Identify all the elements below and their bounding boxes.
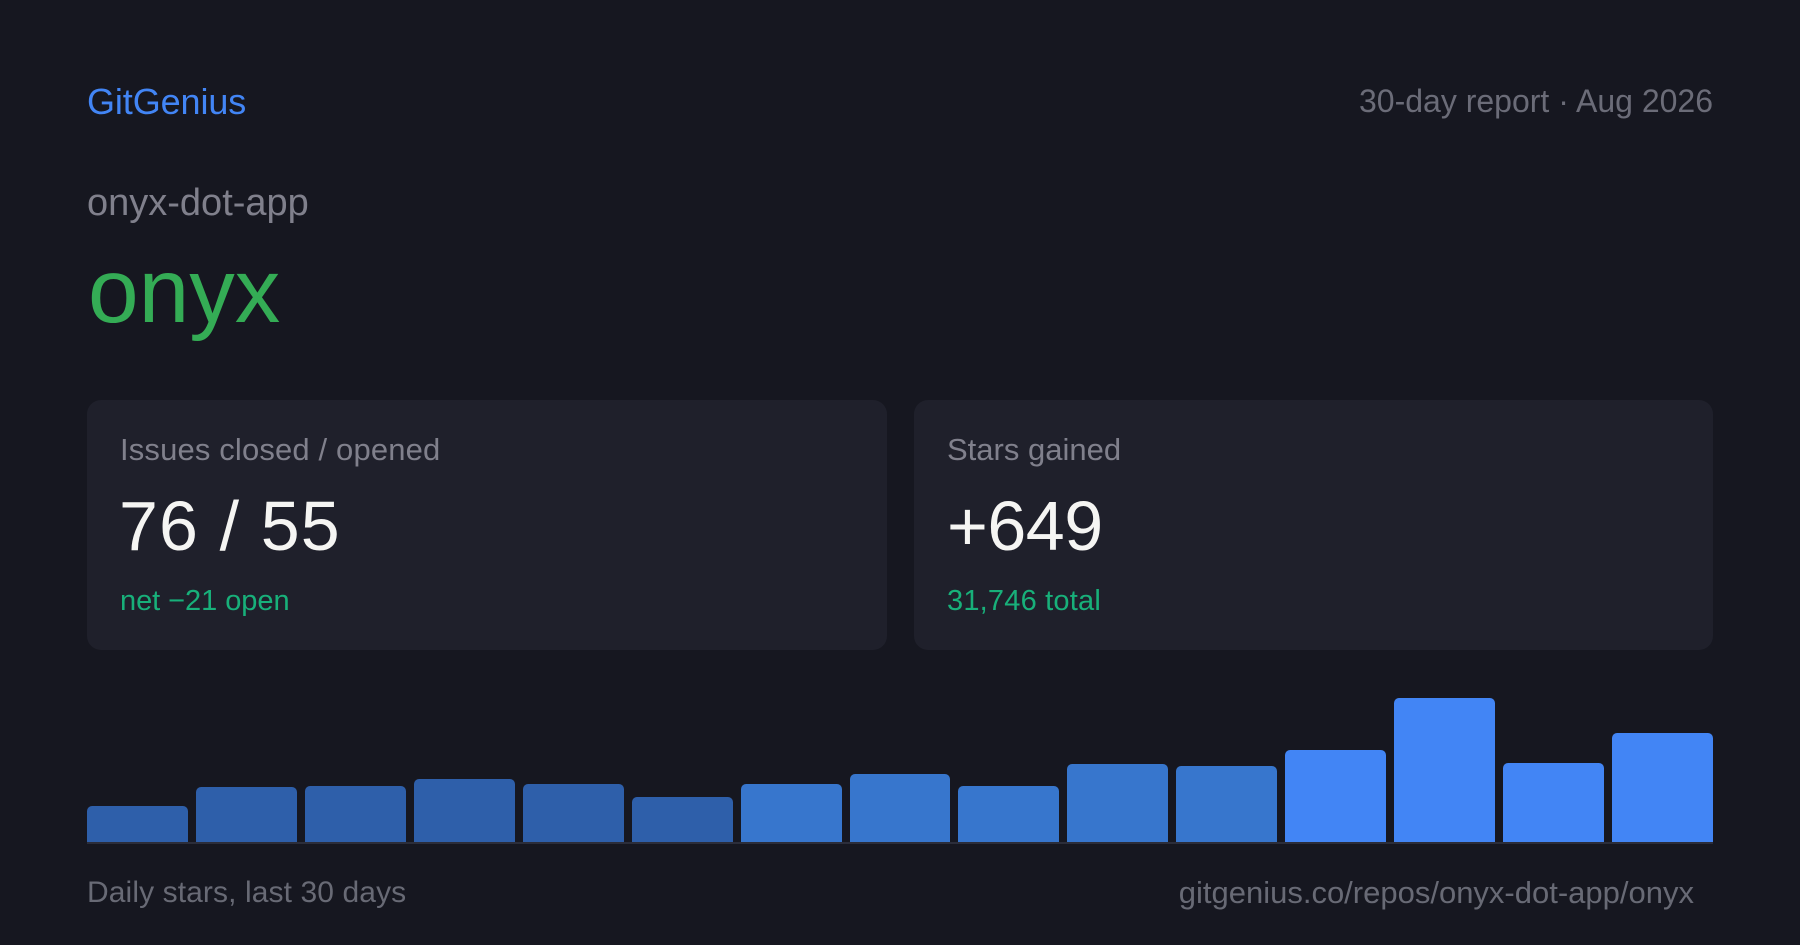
stars total: 31,746 total (947, 585, 1101, 617)
issues net change: net −21 open (120, 585, 290, 617)
chart baseline (87, 842, 1713, 844)
panel: stars (914, 400, 1713, 650)
panel: issues (87, 400, 887, 650)
repository URL: gitgenius.co/repos/onyx-dot-app/onyx (1179, 875, 1694, 910)
report date: 30-day report · Aug 2026 (1359, 83, 1713, 119)
repository owner: onyx-dot-app (87, 182, 309, 224)
bar chart: daily stars (87, 698, 1713, 844)
issues value: 76 / 55 (119, 487, 341, 565)
chart caption: Daily stars, last 30 days (87, 876, 406, 909)
stars label: Stars gained (947, 432, 1121, 467)
repository name: onyx (88, 241, 280, 342)
issues label: Issues closed / opened (120, 432, 440, 467)
bars (87, 698, 1713, 842)
brand name: GitGenius (87, 81, 246, 122)
stars value: +649 (947, 487, 1103, 565)
